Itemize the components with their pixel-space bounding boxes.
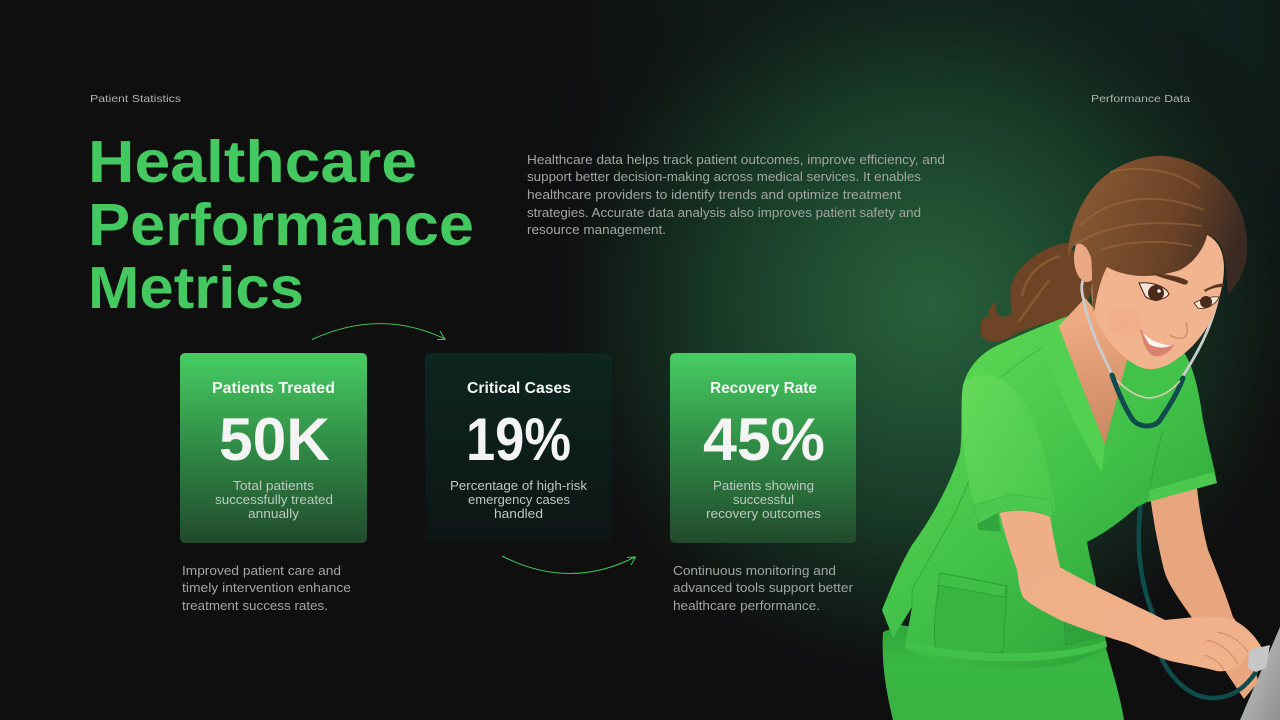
panel: recovery rate: Patients showing [713, 478, 814, 493]
side seam [912, 480, 969, 607]
text: monitoring note: healthcare performance. [673, 598, 820, 613]
near sleeve [962, 348, 1055, 532]
panel: patients treated: successfully treated [215, 492, 333, 507]
title: Healthcare [88, 129, 417, 195]
nose [1170, 322, 1187, 338]
stethoscope inner wire [1117, 380, 1180, 398]
label: performance data: Performance Data [1091, 93, 1190, 105]
text: patient care note: Improved patient care and [182, 563, 341, 578]
stethoscope chest piece [1248, 645, 1270, 672]
panel: critical cases [425, 353, 612, 543]
pocket [934, 573, 1007, 653]
far arm [1150, 488, 1258, 699]
arrow: top curved [312, 324, 445, 340]
collar right [1102, 350, 1190, 473]
title [88, 129, 474, 321]
text: monitoring note: Continuous monitoring and [673, 563, 836, 578]
pants [883, 625, 1124, 720]
panel: critical cases: handled [494, 506, 543, 521]
hem [905, 640, 1107, 661]
illustration: nurse with stethoscope [882, 156, 1280, 720]
panel: critical cases: 19% [466, 406, 571, 473]
right sleeve seam [1150, 430, 1163, 490]
text: patient care note: treatment success rates. [182, 598, 328, 613]
right sleeve cuff [1148, 472, 1217, 502]
laptop corner [1240, 627, 1280, 720]
panel: patients treated: Total patients [233, 478, 315, 493]
panel: recovery rate [670, 353, 856, 543]
ponytail [980, 243, 1095, 342]
ear [1074, 234, 1100, 282]
panel: patients treated: annually [248, 506, 300, 521]
description text: support better decision-making across medical services. It enables [527, 169, 921, 184]
panel: recovery rate: recovery outcomes [706, 506, 822, 521]
cheek blush [1107, 308, 1143, 336]
face [1092, 228, 1224, 369]
label: patient statistics: Patient Statistics [90, 93, 181, 105]
right eyebrow [1204, 284, 1224, 292]
description text: Healthcare data helps track patient outcomes, improve efficiency, and [527, 152, 945, 167]
panel: patients treated: Patients Treated [212, 380, 335, 397]
title: Performance [88, 192, 474, 258]
left eye [1139, 283, 1169, 301]
title: Metrics [88, 255, 304, 321]
stethoscope yoke [1112, 375, 1183, 426]
text: monitoring note: advanced tools support better [673, 580, 854, 595]
panel: patients treated: 50K [219, 406, 330, 473]
panel: recovery rate: 45% [703, 406, 825, 473]
panel: patients treated [180, 353, 367, 543]
description text: resource management. [527, 222, 666, 237]
panel: critical cases: emergency cases [468, 492, 570, 507]
collar left [1040, 325, 1105, 473]
second pocket [1064, 622, 1102, 645]
hair [1068, 156, 1247, 312]
stethoscope tube [1139, 428, 1256, 698]
panel: recovery rate: Recovery Rate [710, 380, 817, 397]
hair highlights [1074, 169, 1204, 250]
panel: critical cases: Percentage of high-risk [450, 478, 588, 493]
arrow: bottom curved [502, 556, 636, 573]
mouth [1140, 328, 1174, 356]
text: patient care note: timely intervention enhance [182, 580, 351, 595]
right eye [1194, 296, 1219, 308]
description text: strategies. Accurate data analysis also improves patient safety and [527, 205, 921, 220]
panel: critical cases: Critical Cases [467, 380, 571, 397]
scrub top [882, 312, 1217, 669]
left eyebrow [1150, 273, 1188, 285]
description text [527, 152, 945, 237]
stethoscope silver tubes [1082, 274, 1217, 376]
near arm and hand [998, 503, 1262, 671]
neck and v-neck skin [1058, 298, 1130, 445]
text: monitoring note [673, 563, 854, 613]
panel: recovery rate: successful [733, 492, 794, 507]
text: patient care note [182, 563, 351, 613]
description text: healthcare providers to identify trends and optimize treatment [527, 187, 901, 202]
